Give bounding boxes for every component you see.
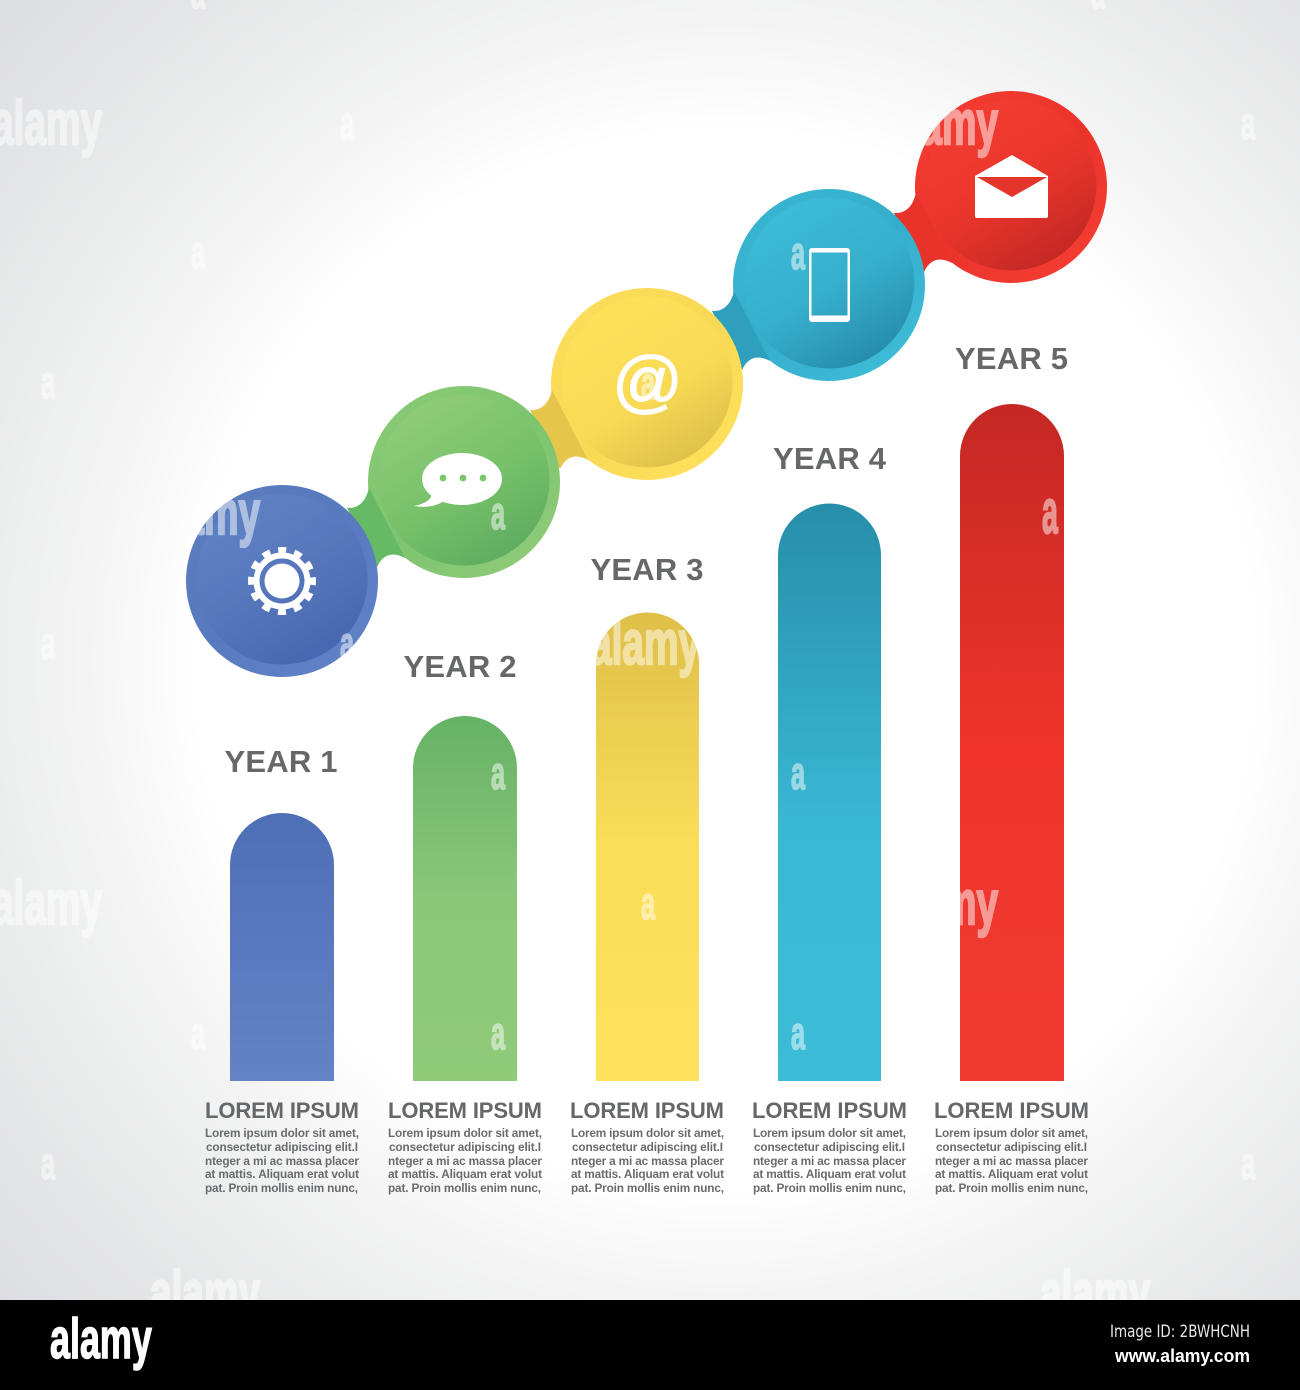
circle: year 4 phone: [712, 189, 925, 381]
icon: at sign: @: [612, 342, 683, 420]
text block: column 5: pat. Proin mollis enim nunc,: [935, 1181, 1088, 1195]
text block: column 2: at mattis. Aliquam erat volut: [388, 1167, 542, 1181]
text block: column 3: consectetur adipiscing elit.I: [572, 1140, 723, 1154]
watermarks on background: a: [191, 226, 205, 278]
watermarks on bars: a: [791, 747, 805, 799]
text block: column 4: at mattis. Aliquam erat volut: [753, 1167, 906, 1181]
text block: column 5: [934, 1098, 1089, 1195]
footer logo: alamy: [50, 1308, 152, 1371]
watermarks on background: alamy: [150, 1258, 260, 1327]
circle: year 3 at sign: [530, 288, 743, 480]
text block: column 3: Lorem ipsum dolor sit amet,: [571, 1126, 724, 1140]
label: year 2: YEAR 2: [404, 649, 516, 684]
icon: phone: [809, 248, 850, 322]
watermarks on bars: a: [641, 877, 655, 929]
text block: column 3: nteger a mi ac massa placer: [571, 1154, 724, 1168]
icon: envelope: [975, 155, 1048, 218]
watermark on blue circle: [198, 500, 353, 656]
text block: column 2: consectetur adipiscing elit.I: [389, 1140, 541, 1154]
text block: column 1: nteger a mi ac massa placer: [205, 1154, 359, 1168]
watermark on blue circle: a: [340, 617, 354, 669]
text block: column 1: Lorem ipsum dolor sit amet,: [205, 1126, 359, 1140]
watermarks on bars: alamy: [590, 608, 700, 677]
watermarks on bars: [491, 478, 1059, 1059]
watermarks on bars: alamy: [888, 868, 998, 937]
text block: column 3: pat. Proin mollis enim nunc,: [571, 1181, 724, 1195]
icon: gear: [251, 550, 313, 612]
text block: column 4: consectetur adipiscing elit.I: [754, 1140, 905, 1154]
watermarks on bars: a: [791, 1007, 805, 1059]
text block: column 5: Lorem ipsum dolor sit amet,: [935, 1126, 1088, 1140]
text block: column 2: [388, 1098, 542, 1195]
watermark on teal circle: a: [791, 227, 805, 279]
text block: column 4: [752, 1098, 907, 1195]
text block: column 3: at mattis. Aliquam erat volut: [571, 1167, 724, 1181]
text block: column 5: consectetur adipiscing elit.I: [936, 1140, 1087, 1154]
text block: column 2: nteger a mi ac massa placer: [388, 1154, 542, 1168]
label: year 1: YEAR 1: [224, 744, 338, 779]
watermarks on bars: a: [491, 747, 505, 799]
watermarks on background: a: [1241, 97, 1255, 149]
bar: year 2: [413, 716, 517, 1081]
label: year 3: YEAR 3: [590, 552, 704, 587]
text block: column 2: LOREM IPSUM: [388, 1098, 542, 1123]
text block: column 1: LOREM IPSUM: [205, 1098, 359, 1123]
text block: column 5: at mattis. Aliquam erat volut: [935, 1167, 1088, 1181]
watermark on green circle: a: [491, 487, 505, 539]
watermarks on background: a: [191, 1007, 205, 1059]
watermarks on background: a: [41, 1137, 55, 1189]
text block: column 1: pat. Proin mollis enim nunc,: [205, 1181, 358, 1195]
watermarks on background: a: [1241, 1137, 1255, 1189]
watermarks on background: alamy: [1040, 1258, 1150, 1327]
watermarks on background: a: [340, 97, 354, 149]
bar: year 3: [596, 612, 699, 1081]
footer image id: Image ID: 2BWHCNH: [1110, 1322, 1250, 1342]
watermark on blue circle: alamy: [150, 478, 260, 547]
text block: column 4: LOREM IPSUM: [752, 1098, 907, 1123]
footer url: www.alamy.com: [1114, 1346, 1250, 1366]
text block: column 2: pat. Proin mollis enim nunc,: [388, 1181, 541, 1195]
text block: column 3: [570, 1098, 724, 1195]
label: year 5: YEAR 5: [955, 341, 1068, 376]
bar: year 5: [960, 404, 1064, 1081]
icon: chat bubble: [414, 453, 502, 507]
text block: column 3: LOREM IPSUM: [570, 1098, 724, 1123]
bar: year 1: [230, 813, 334, 1081]
text block: column 5: nteger a mi ac massa placer: [935, 1154, 1088, 1168]
circle: year 5 email: [888, 88, 1107, 283]
label: year 4: YEAR 4: [773, 441, 887, 476]
text block: column 1: at mattis. Aliquam erat volut: [205, 1167, 359, 1181]
watermark on red circle: alamy: [888, 88, 998, 157]
text block: column 5: LOREM IPSUM: [934, 1098, 1089, 1123]
watermark on yellow circle: a: [641, 357, 655, 409]
circle: year 1 gear: [186, 485, 378, 677]
text block: column 4: pat. Proin mollis enim nunc,: [753, 1181, 906, 1195]
watermarks on bars: a: [1042, 478, 1059, 547]
bar: year 4: [778, 504, 881, 1081]
watermarks on bars: a: [491, 1007, 505, 1059]
text block: column 1: [205, 1098, 359, 1195]
text block: column 4: nteger a mi ac massa placer: [753, 1154, 906, 1168]
text block: column 2: Lorem ipsum dolor sit amet,: [388, 1126, 542, 1140]
watermarks on background: a: [41, 617, 55, 669]
circle: year 2 chat: [347, 386, 560, 578]
text block: column 1: consectetur adipiscing elit.I: [206, 1140, 358, 1154]
footer bar: [0, 1300, 1300, 1390]
text block: column 4: Lorem ipsum dolor sit amet,: [753, 1126, 906, 1140]
watermarks on background: a: [41, 356, 55, 408]
